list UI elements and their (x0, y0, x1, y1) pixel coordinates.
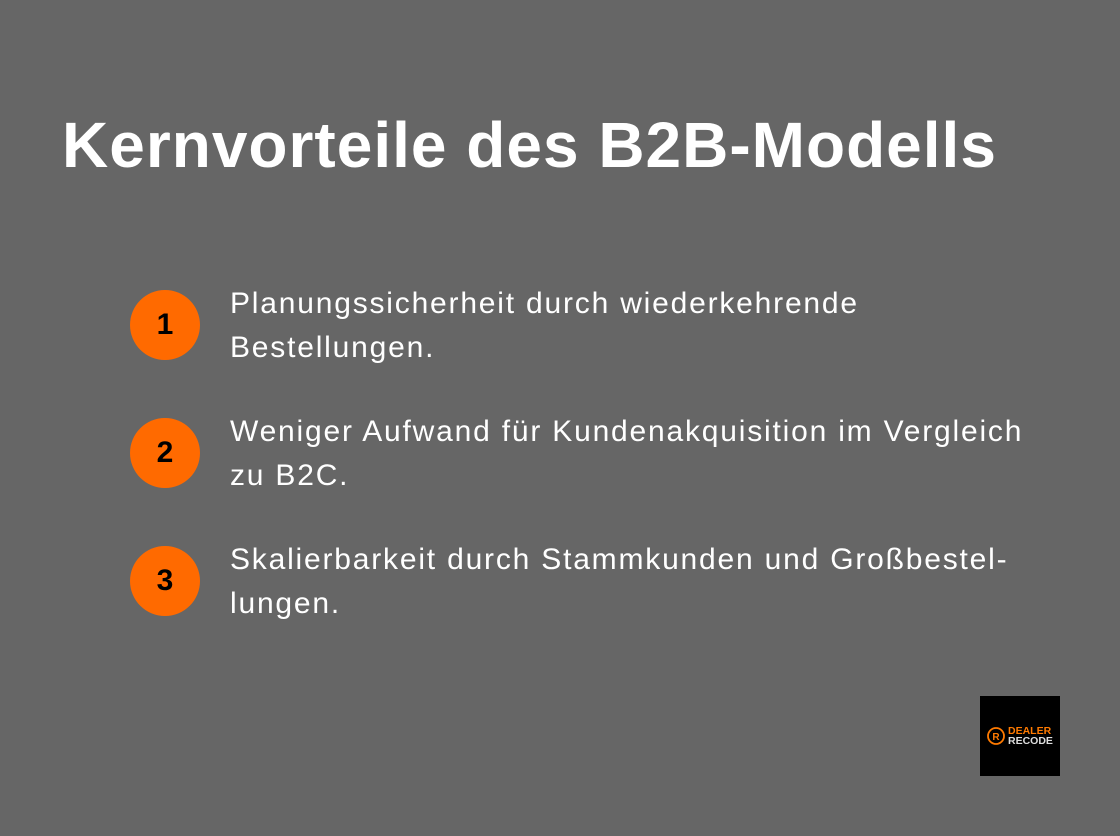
item 3 (130, 543, 1008, 620)
logo: DEALER (1008, 725, 1052, 737)
text 3: Skalierbarkeit durch Stammkunden und Großbestel- (230, 543, 1008, 576)
badge 2: 2 (157, 436, 173, 469)
text 1 (230, 287, 859, 364)
badge 1: 1 (157, 308, 173, 341)
text 1: Planungssicherheit durch wiederkehrende (230, 287, 859, 320)
text 1: Bestellungen. (230, 331, 435, 364)
badge 3: 3 (157, 564, 173, 597)
item 1 (130, 287, 859, 364)
text 3: lungen. (230, 587, 341, 620)
logo: RECODE (1008, 735, 1053, 747)
badge 2 (130, 418, 200, 488)
badge 1 (130, 290, 200, 360)
text 2: Weniger Aufwand für Kundenakquisition im Vergleich (230, 415, 1023, 448)
text 2: zu B2C. (230, 459, 349, 492)
title: Kernvorteile des B2B-Modells (62, 109, 997, 181)
text 2 (230, 415, 1023, 492)
logo (980, 696, 1060, 776)
badge 3 (130, 546, 200, 616)
text 3 (230, 543, 1008, 620)
item 2 (130, 415, 1023, 492)
logo: R (992, 732, 1000, 743)
